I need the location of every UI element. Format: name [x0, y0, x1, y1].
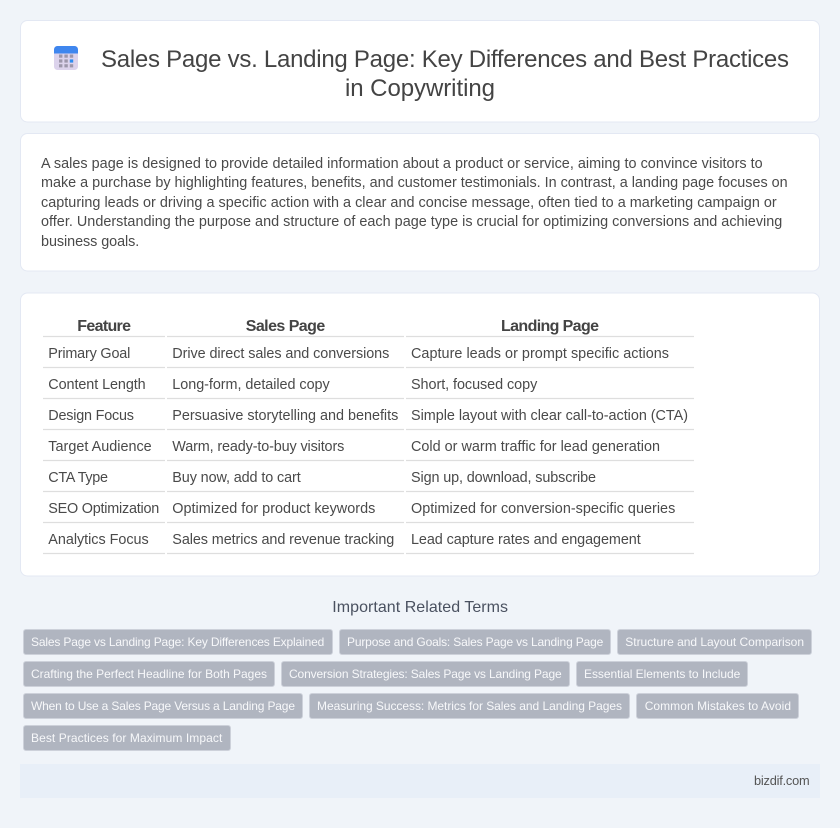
table row: Target Audience: [43, 439, 694, 460]
table row: SEO Optimization: Optimized for conversion-specific queries: [411, 501, 675, 517]
table row: SEO Optimization: SEO Optimization: [48, 501, 159, 517]
table row: Analytics Focus: Lead capture rates and engagement: [411, 532, 641, 548]
table row: Design Focus: Persuasive storytelling and benefits: [172, 408, 398, 424]
table row: Analytics Focus: [43, 532, 694, 554]
table header: Sales Page: [246, 318, 325, 335]
tag: Structure and Layout Comparison: [625, 635, 804, 649]
text block: introduction paragraph: business goals.: [41, 234, 139, 250]
text block: introduction paragraph: make a purchase by highlighting features, benefits, and customer testimonials. In contrast, a landing page focuses on: [41, 175, 788, 191]
panel: title header: [20, 20, 820, 122]
table row: Target Audience: Cold or warm traffic for lead generation: [411, 439, 660, 455]
tag: Best Practices for Maximum Impact: [31, 731, 223, 745]
table row: Analytics Focus: Sales metrics and revenue tracking: [172, 532, 394, 548]
tag: [24, 726, 230, 750]
table row: Design Focus: [43, 408, 694, 430]
table row: SEO Optimization: [43, 501, 694, 522]
table header: Landing Page: [501, 318, 599, 335]
text block: introduction paragraph: [41, 156, 788, 250]
table row: Content Length: [43, 377, 694, 398]
tag: [340, 630, 610, 654]
tag: [618, 630, 812, 654]
tag: [24, 630, 332, 654]
table row: SEO Optimization: Optimized for product keywords: [172, 501, 375, 517]
table row: Primary Goal: Primary Goal: [48, 346, 130, 362]
tag: [636, 694, 798, 718]
panel: introduction: [20, 134, 820, 271]
tag: [282, 662, 570, 686]
tag: [310, 694, 630, 718]
table row: CTA Type: Buy now, add to cart: [172, 470, 301, 486]
text block: introduction paragraph: offer. Understanding the purpose and structure of each page type is crucial for optimizing conversions and achieving: [41, 214, 782, 230]
table row: Target Audience: Warm, ready-to-buy visitors: [172, 439, 344, 455]
tag: Measuring Success: Metrics for Sales and Landing Pages: [317, 699, 622, 713]
table row: Content Length: Content Length: [48, 377, 146, 393]
table row: CTA Type: CTA Type: [48, 470, 108, 486]
table row: Primary Goal: Drive direct sales and conversions: [172, 346, 389, 362]
tag: When to Use a Sales Page Versus a Landing Page: [31, 699, 295, 713]
table row: Analytics Focus: Analytics Focus: [48, 532, 149, 548]
heading: title: [101, 46, 789, 102]
text block: introduction paragraph: A sales page is designed to provide detailed information about a product or service, aiming to convince visitors to: [41, 156, 763, 172]
tag: Sales Page vs Landing Page: Key Differences Explained: [31, 635, 324, 649]
tag: Essential Elements to Include: [584, 667, 741, 681]
footer: [20, 764, 820, 798]
heading: important related terms: Important Related Terms: [332, 599, 508, 616]
footer credit: bizdif.com: [754, 773, 810, 788]
table row: Primary Goal: Capture leads or prompt specific actions: [411, 346, 669, 362]
text block: introduction paragraph: capturing leads or driving a specific action with a clear and concise message, often tied to a marketing campaign or: [41, 195, 777, 211]
table row: CTA Type: [43, 470, 694, 492]
icon: calendar: [54, 46, 78, 70]
tag: [576, 662, 748, 686]
table row: Content Length: Long-form, detailed copy: [172, 377, 330, 393]
tag: [24, 694, 302, 718]
tag: Purpose and Goals: Sales Page vs Landing Page: [347, 635, 604, 649]
table row: Design Focus: Design Focus: [48, 408, 134, 424]
heading: title: Sales Page vs. Landing Page: Key Differences and Best Practices: [101, 46, 789, 73]
tag: Common Mistakes to Avoid: [645, 699, 791, 713]
table row: Design Focus: Simple layout with clear call-to-action (CTA): [411, 408, 688, 424]
table row: Primary Goal: [43, 346, 694, 368]
table row: Content Length: Short, focused copy: [411, 377, 538, 393]
table header: Feature: [77, 318, 131, 335]
table row: Target Audience: Target Audience: [48, 439, 152, 455]
table row: CTA Type: Sign up, download, subscribe: [411, 470, 596, 486]
tag: Crafting the Perfect Headline for Both Pages: [31, 667, 267, 681]
panel: related term tags: [24, 630, 812, 750]
panel: comparison table: [20, 293, 820, 576]
tag: Conversion Strategies: Sales Page vs Landing Page: [289, 667, 562, 681]
table header: [43, 318, 694, 336]
tag: [24, 662, 274, 686]
heading: title: in Copywriting: [345, 75, 495, 102]
